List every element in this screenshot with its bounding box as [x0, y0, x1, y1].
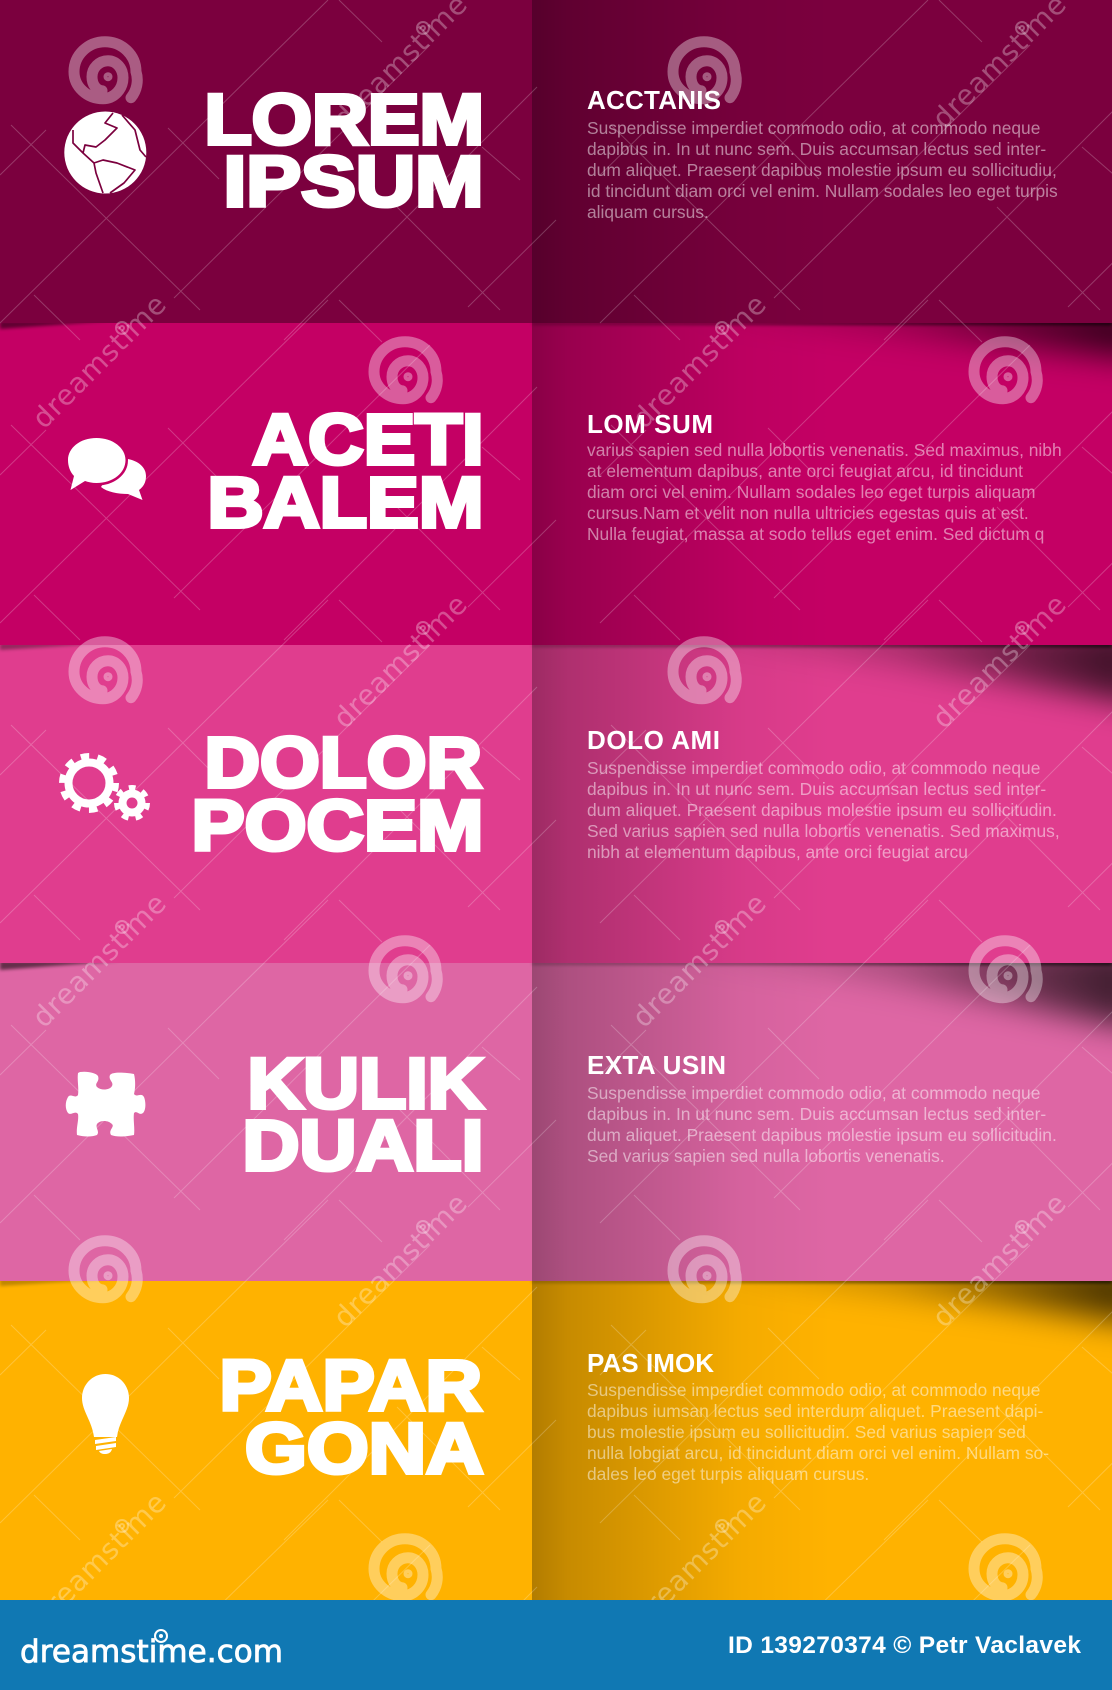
band 2: aceti balem — [0, 303, 1112, 645]
watermark: dreamstime text: dreamstime — [26, 887, 173, 1034]
watermark: dreamstime text: dreamstime — [26, 288, 173, 435]
watermark: dreamstime text: dreamstime — [327, 1187, 474, 1334]
watermark: dreamstime text: dreamstime — [26, 1486, 173, 1633]
text block: lom sum — [587, 409, 1062, 544]
watermark: dreamstime text: dreamstime — [626, 887, 773, 1034]
watermark: dreamstime text: dreamstime — [327, 588, 474, 735]
text block: lom sum: at elementum dapibus, ante orci feugiat arcu, id tincidunt — [587, 461, 1023, 481]
icon: puzzle piece — [66, 1072, 145, 1136]
title: dolor pocem — [192, 724, 484, 866]
watermark: dreamstime text: dreamstime — [626, 288, 773, 435]
text block: lom sum: cursus.Nam et velit non nulla ultricies egestas quis at est. — [587, 503, 1029, 523]
band 5: papar gona — [0, 1261, 1112, 1600]
text block: acctanis: id tincidunt diam orci vel enim. Nullam sodales leo eget turpis — [587, 181, 1058, 201]
text block: acctanis — [587, 85, 1058, 222]
text block: dolo ami: Suspendisse imperdiet commodo odio, at commodo neque — [587, 758, 1040, 778]
text block: lom sum: varius sapien sed nulla lobortis venenatis. Sed maximus, nibh — [587, 440, 1062, 460]
title: kulik duali: DUALI — [242, 1107, 484, 1186]
text block: lom sum: LOM SUM — [587, 409, 713, 439]
title: aceti balem: BALEM — [208, 464, 484, 543]
text block: dolo ami: Sed varius sapien sed nulla lobortis venenatis. Sed maximus, — [587, 821, 1060, 841]
icon: chat bubbles — [68, 438, 146, 500]
text block: dolo ami: DOLO AMI — [587, 725, 720, 755]
band 3: dolor pocem — [0, 625, 1112, 963]
watermark: spirals — [74, 42, 1037, 1596]
watermark: dreamstime text: dreamstime — [926, 588, 1073, 735]
text block: acctanis: ACCTANIS — [587, 85, 721, 115]
watermark: dreamstime text: dreamstime — [926, 1187, 1073, 1334]
text block: lom sum: Nulla feugiat, massa at sodo tellus eget enim. Sed dictum q — [587, 524, 1044, 544]
title: lorem ipsum — [204, 81, 484, 222]
text block: lom sum: diam orci vel enim. Nullam sodales leo eget turpis aliquam — [587, 482, 1036, 502]
title: kulik duali — [242, 1045, 484, 1186]
text block: exta usin — [587, 1050, 1057, 1166]
text block: pas imok: dales leo eget turpis aliquam cursus. — [587, 1464, 869, 1484]
text block: pas imok: bus molestie ipsum eu sollicitudin. Sed varius sapien sed — [587, 1422, 1026, 1442]
text block: acctanis: Suspendisse imperdiet commodo odio, at commodo neque — [587, 118, 1040, 138]
text block: dolo ami — [587, 725, 1060, 862]
text block: exta usin: dum aliquet. Praesent dapibus molestie ipsum eu sollicitudin. — [587, 1125, 1057, 1145]
text block: pas imok: Suspendisse imperdiet commodo odio, at commodo neque — [587, 1380, 1040, 1400]
watermark: dreamstime text: dreamstime — [626, 1486, 773, 1633]
title: aceti balem — [208, 401, 484, 543]
text block: dolo ami: dum aliquet. Praesent dapibus molestie ipsum eu sollicitudin. — [587, 800, 1057, 820]
icon: light bulb — [82, 1374, 129, 1454]
title: papar gona — [220, 1347, 484, 1489]
text block: exta usin: Sed varius sapien sed nulla lobortis venenatis. — [587, 1146, 945, 1166]
text block: dolo ami: nibh at elementum dapibus, ante orci feugiat arcu — [587, 842, 968, 862]
text block: acctanis: dapibus in. In ut nunc sem. Duis accumsan lectus sed inter- — [587, 139, 1046, 159]
icon: globe — [64, 112, 146, 194]
text block: pas imok: nulla lobgiat arcu, id tincidunt diam orci vel enim. Nullam so- — [587, 1443, 1049, 1463]
footer credit: ID 139270374 © Petr Vaclavek — [728, 1632, 1081, 1659]
title: lorem ipsum: IPSUM — [224, 143, 484, 222]
title: aceti balem: ACETI — [252, 401, 484, 480]
title: papar gona: GONA — [245, 1410, 484, 1489]
text block: pas imok: dapibus iumsan lectus sed interdum aliquet. Praesent dapi- — [587, 1401, 1043, 1421]
text block: exta usin: EXTA USIN — [587, 1050, 726, 1080]
footer logo: dreamstime.com: dreamstime.com — [20, 1634, 283, 1670]
text block: dolo ami: dapibus in. In ut nunc sem. Duis accumsan lectus sed inter- — [587, 779, 1046, 799]
title: lorem ipsum: LOREM — [204, 81, 484, 160]
text block: pas imok: PAS IMOK — [587, 1348, 714, 1378]
text block: pas imok — [587, 1348, 1049, 1484]
text block: acctanis: aliquam cursus. — [587, 202, 709, 222]
title: dolor pocem: POCEM — [192, 787, 484, 866]
title: dolor pocem: DOLOR — [204, 724, 482, 803]
title: kulik duali: KULIK — [248, 1045, 484, 1124]
text block: exta usin: Suspendisse imperdiet commodo odio, at commodo neque — [587, 1083, 1040, 1103]
icon: gears — [62, 756, 147, 818]
band 4: kulik duali — [0, 943, 1112, 1281]
text block: acctanis: dum aliquet. Praesent dapibus molestie ipsum eu sollicitudiu, — [587, 160, 1057, 180]
footer bar — [0, 1600, 1112, 1690]
band 1: lorem ipsum — [0, 0, 1112, 323]
title: papar gona: PAPAR — [220, 1347, 482, 1426]
text block: exta usin: dapibus in. In ut nunc sem. Duis accumsan lectus sed inter- — [587, 1104, 1046, 1124]
